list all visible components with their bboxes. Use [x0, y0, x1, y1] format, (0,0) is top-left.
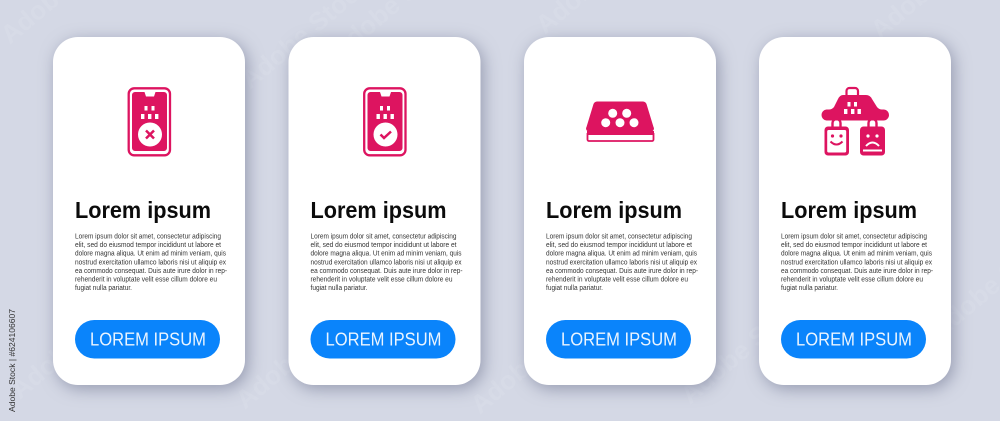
- body text: Lorem ipsum dolor sit amet, consectetur adipiscing: [781, 234, 927, 240]
- icon: phone with check: [364, 88, 406, 155]
- button: [75, 320, 220, 358]
- panel: card 1: [53, 37, 245, 385]
- body text: Lorem ipsum dolor sit amet, consectetur adipiscing: [310, 234, 457, 240]
- text: Adobe Stock: [5, 279, 146, 405]
- body text: elit, sed do eiusmod tempor incididunt ut labore et: [310, 242, 457, 249]
- body text: rehenderit in voluptate velit esse cillum dolore eu: [75, 276, 217, 284]
- icon: phone with cross: [129, 88, 170, 155]
- body text: rehenderit in voluptate velit esse cillum dolore eu: [310, 276, 453, 284]
- body text: [310, 234, 463, 292]
- body text: [781, 234, 934, 292]
- button: LOREM IPSUM: [326, 330, 442, 350]
- button: [546, 320, 691, 358]
- body text: nostrud exercitation ullamco laboris nisi ut aliquip ex: [310, 259, 462, 266]
- body text: dolore magna aliqua. Ut enim ad minim veniam, quis: [310, 251, 462, 258]
- body text: nostrud exercitation ullamco laboris nisi ut aliquip ex: [781, 259, 932, 266]
- stock id label: Adobe Stock | #624106607: [7, 309, 17, 412]
- body text: fugiat nulla pariatur.: [781, 285, 838, 292]
- heading: Lorem ipsum: [310, 197, 446, 223]
- body text: rehenderit in voluptate velit esse cillum dolore eu: [546, 276, 688, 284]
- text: Adobe Stock: [675, 284, 816, 410]
- body text: elit, sed do eiusmod tempor incididunt ut labore et: [75, 242, 221, 249]
- heading: Lorem ipsum: [546, 197, 682, 223]
- heading: Lorem ipsum: [75, 197, 211, 223]
- button: [310, 320, 456, 358]
- body text: ea commodo consequat. Duis aute irure dolor in rep-: [75, 268, 228, 275]
- body text: fugiat nulla pariatur.: [75, 285, 132, 292]
- body text: [75, 234, 228, 292]
- button: LOREM IPSUM: [90, 330, 206, 350]
- body text: dolore magna aliqua. Ut enim ad minim veniam, quis: [781, 251, 932, 258]
- button: [781, 320, 926, 358]
- panel: card 2: [288, 37, 480, 385]
- button: LOREM IPSUM: [796, 330, 912, 350]
- body text: dolore magna aliqua. Ut enim ad minim veniam, quis: [546, 251, 697, 258]
- body text: fugiat nulla pariatur.: [546, 285, 603, 292]
- heading: Lorem ipsum: [781, 197, 917, 223]
- panel: card 4: [759, 37, 951, 385]
- body text: Lorem ipsum dolor sit amet, consectetur adipiscing: [546, 234, 692, 240]
- body text: dolore magna aliqua. Ut enim ad minim veniam, quis: [75, 251, 226, 258]
- body text: ea commodo consequat. Duis aute irure dolor in rep-: [546, 268, 699, 275]
- body text: elit, sed do eiusmod tempor incididunt ut labore et: [781, 242, 927, 249]
- panel: card 3: [524, 37, 716, 385]
- text: Adobe Stock: [465, 294, 606, 420]
- body text: nostrud exercitation ullamco laboris nisi ut aliquip ex: [75, 259, 226, 266]
- body text: [546, 234, 699, 292]
- icon: taxi with happy and sad bags: [822, 88, 889, 156]
- button: LOREM IPSUM: [561, 330, 677, 350]
- body text: ea commodo consequat. Duis aute irure dolor in rep-: [781, 268, 934, 275]
- body text: Lorem ipsum dolor sit amet, consectetur adipiscing: [75, 234, 221, 240]
- body text: elit, sed do eiusmod tempor incididunt ut labore et: [546, 242, 692, 249]
- icon: book tray with dots: [586, 102, 654, 141]
- body text: fugiat nulla pariatur.: [310, 285, 368, 292]
- body text: nostrud exercitation ullamco laboris nisi ut aliquip ex: [546, 259, 697, 266]
- text: Adobe Stock: [230, 289, 371, 415]
- body text: rehenderit in voluptate velit esse cillum dolore eu: [781, 276, 923, 284]
- body text: ea commodo consequat. Duis aute irure dolor in rep-: [310, 268, 463, 275]
